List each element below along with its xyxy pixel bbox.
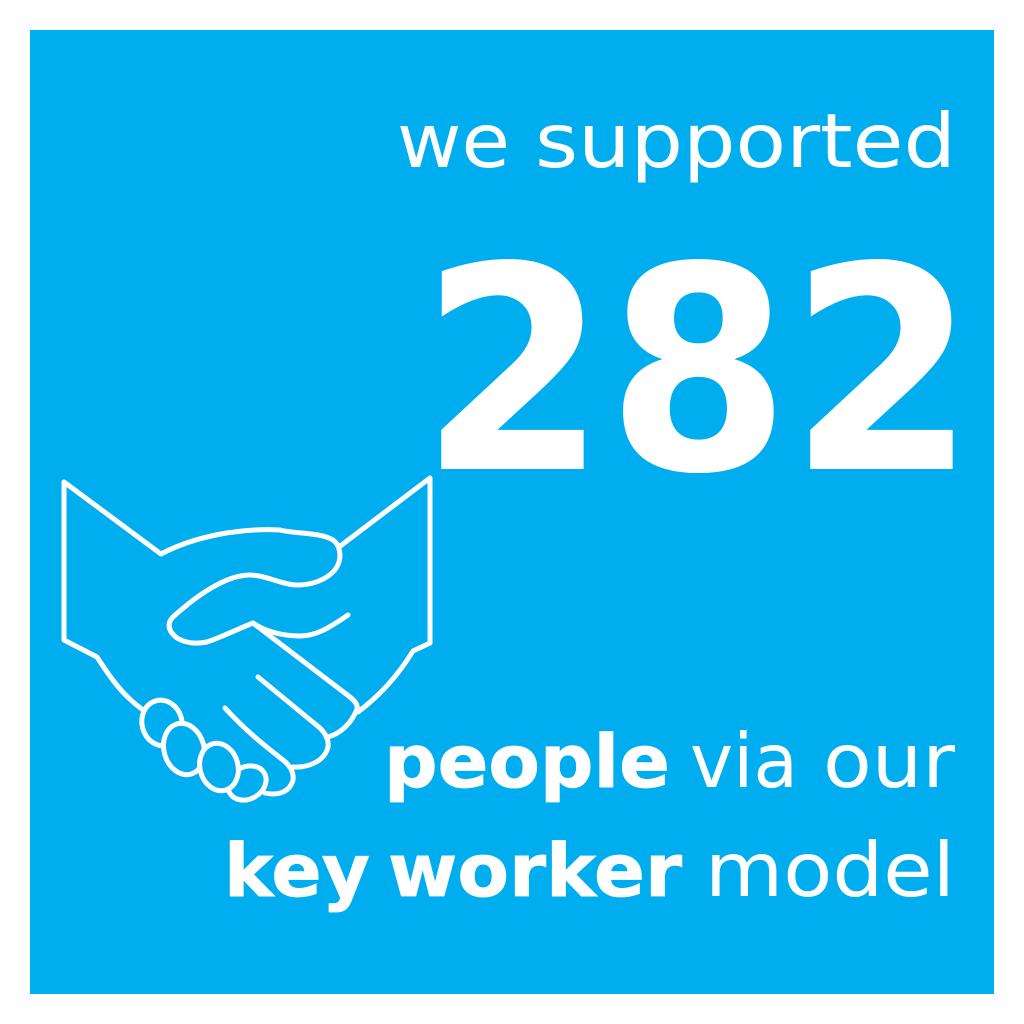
heading: we supported: we xyxy=(397,97,510,185)
text: people via our: our xyxy=(823,717,955,805)
text: key worker model: key xyxy=(224,829,370,914)
text: people via our: via xyxy=(690,717,798,805)
big number: 282: 2 xyxy=(420,206,607,536)
left cuff and upper hand xyxy=(64,482,357,737)
knuckle four xyxy=(222,759,272,807)
big number: 282: 2 xyxy=(789,206,976,536)
text: key worker model: worker xyxy=(388,829,682,914)
text: key worker model: model xyxy=(705,826,955,914)
text: people via our: people xyxy=(384,720,670,805)
knuckle three xyxy=(194,739,244,795)
finger line upper xyxy=(258,677,328,767)
icon: handshake xyxy=(64,478,430,807)
right cuff xyxy=(339,478,430,712)
thumb line xyxy=(253,615,348,636)
heading: we supported: supported xyxy=(535,97,956,185)
knuckle two xyxy=(158,719,210,779)
text: key worker model xyxy=(224,826,955,914)
big number: 282 xyxy=(420,206,976,536)
finger line lower xyxy=(225,708,293,794)
knuckle one xyxy=(137,696,187,750)
big number: 282: 8 xyxy=(607,206,790,536)
heading: we supported xyxy=(397,97,956,185)
text: people via our xyxy=(384,717,955,805)
